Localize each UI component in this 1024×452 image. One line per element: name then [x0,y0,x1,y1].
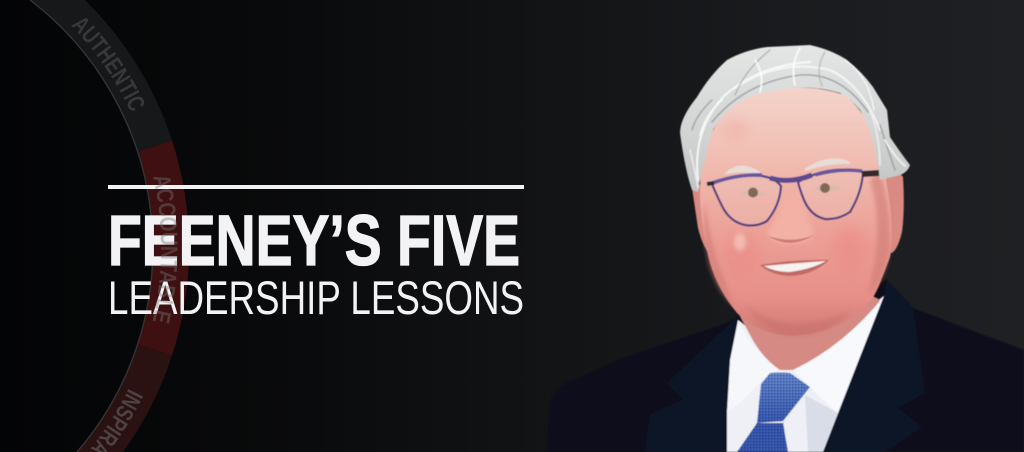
nose highlight [767,195,814,244]
right collar [793,296,884,413]
glasses [707,170,879,226]
left temple [707,183,714,184]
iris [748,188,758,198]
right temple [862,173,879,174]
wheel label: authentic: AUTHENTIC [71,18,144,111]
frame top right [815,170,862,175]
tie blade [737,423,788,452]
left ear [692,184,714,258]
shirt [727,296,884,452]
cheek highlight [734,233,746,251]
forehead redness [721,120,749,140]
neck [738,290,880,370]
title block [108,185,524,324]
tie [737,372,810,452]
face [700,88,892,336]
frame top left [712,175,762,183]
right eyebrow [805,159,850,170]
wheel segment: authentic [30,0,172,152]
right lens [798,170,863,219]
right ear [880,173,904,253]
hair [680,45,910,192]
left eye [740,188,768,198]
eye white [813,185,842,191]
subheading: LEADERSHIP LESSONS [108,271,524,324]
eye white [740,190,768,196]
nose [767,195,814,244]
wheel segment: inspirational [77,344,172,452]
chin fold [745,305,850,336]
tie knot [757,372,810,423]
left eyebrow [727,166,760,173]
left cheek colour [724,233,760,277]
nose underside [768,235,814,243]
teeth [764,261,826,272]
right side shade [868,170,890,295]
right lapel [823,280,925,452]
portrait [547,45,1024,452]
suit jacket [547,280,1024,452]
heading: FEENEY’S FIVE [108,202,520,281]
iris [820,183,830,193]
left side shade [704,200,735,308]
lips [760,260,829,276]
face shading [704,120,890,336]
wheel graphic [30,0,188,452]
wheel label: accountable: ACCOUNTABLE [152,177,178,324]
right eye [813,183,842,193]
tie weave [737,372,810,452]
hair strands [690,48,905,188]
bridge [770,175,812,180]
left lens [712,176,781,226]
hair mass [680,45,910,192]
left lapel [645,317,737,452]
wheel segment: accountable [138,140,189,356]
wheel inner line [30,0,153,452]
left collar [727,320,778,412]
right cheek colour [832,226,868,274]
shirt shadow [805,395,838,452]
mouth [760,260,829,276]
rule above title [108,185,524,189]
